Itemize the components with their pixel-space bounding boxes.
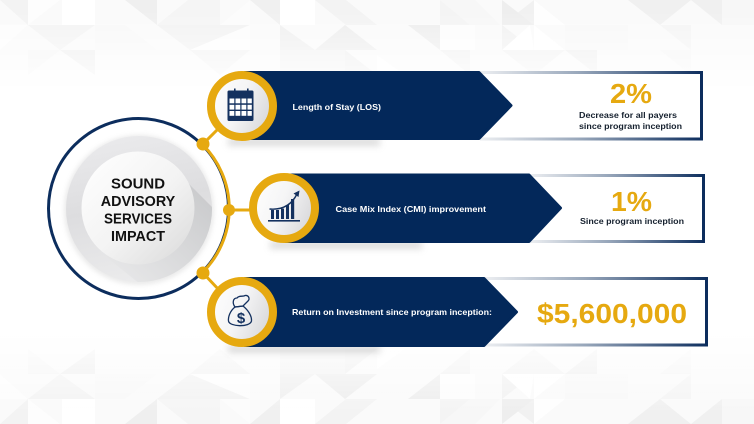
heading: sound advisory services impact: ADVISORY xyxy=(101,194,176,210)
stat: 1%: 1% xyxy=(611,186,652,217)
heading: sound advisory services impact xyxy=(101,176,176,245)
panel: central impact circle xyxy=(48,118,230,300)
band shadow xyxy=(228,138,380,146)
band label: Case Mix Index (CMI) improvement xyxy=(336,204,486,214)
icon: calendar xyxy=(211,75,273,137)
white disc xyxy=(82,152,194,264)
icon: money bag: $ xyxy=(237,310,246,327)
stat description: Decrease for all payers xyxy=(579,110,677,120)
navy arrow band xyxy=(245,72,511,138)
stat: $5,600,000: $5,600,000 xyxy=(537,298,687,329)
icon: rising bar chart xyxy=(253,177,315,239)
result box 3 xyxy=(485,277,708,346)
heading: sound advisory services impact: SOUND xyxy=(111,176,165,192)
navy arrow band xyxy=(285,175,560,242)
panel: length of stay xyxy=(211,71,703,146)
result box 2 xyxy=(530,174,705,243)
band label: Return on Investment since program inception: xyxy=(292,307,492,317)
gray disc with long shadow xyxy=(64,134,214,286)
band label: Length of Stay (LOS) xyxy=(292,102,381,112)
stat: 2%: 2% xyxy=(610,78,652,109)
band shadow xyxy=(228,345,380,353)
panel: case mix index xyxy=(253,174,705,249)
gold arc with connectors and dots xyxy=(196,127,252,291)
panel: return on investment xyxy=(211,277,708,353)
outer ring navy xyxy=(48,118,228,298)
band shadow xyxy=(270,241,422,249)
stat description: since program inception xyxy=(579,121,682,131)
navy arrow band xyxy=(245,278,516,346)
heading: sound advisory services impact: SERVICES xyxy=(104,212,172,228)
icon: money bag xyxy=(211,281,273,343)
heading: sound advisory services impact: IMPACT xyxy=(111,229,165,245)
stat description: Since program inception xyxy=(580,216,684,226)
stat description xyxy=(579,110,682,131)
result box 1 xyxy=(480,71,703,140)
